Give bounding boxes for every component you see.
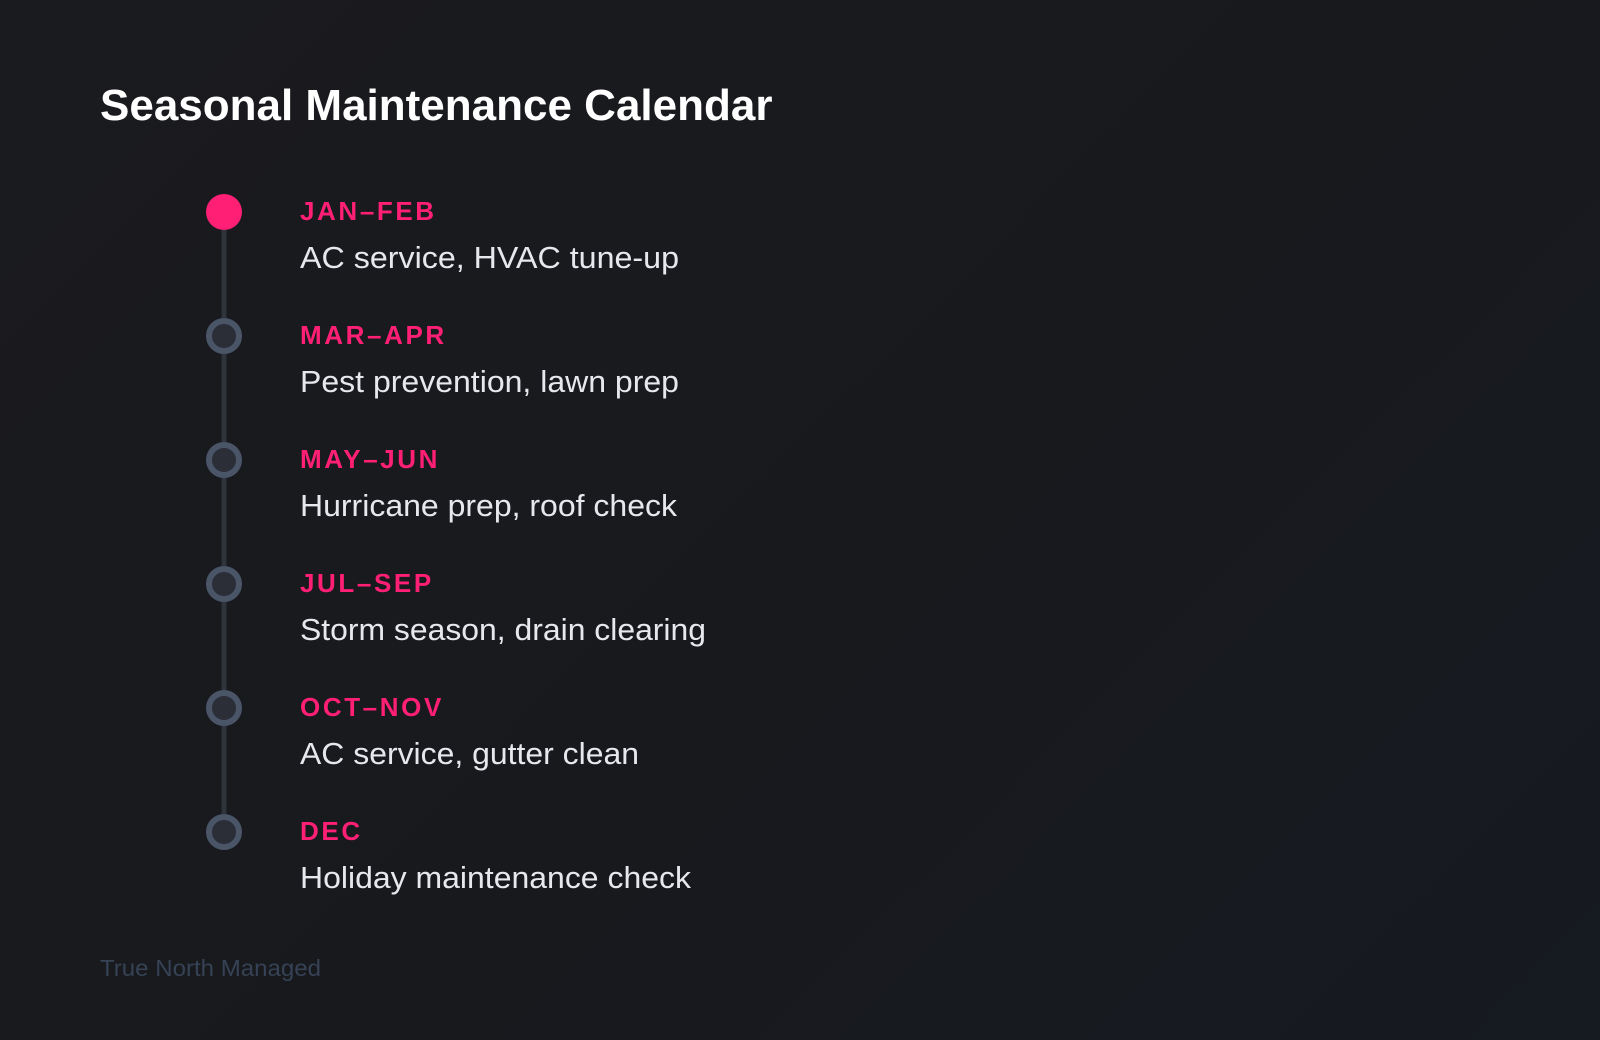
item: jan-feb: JAN–FEB [300,196,437,226]
item: jul-sep: JUL–SEP [300,568,434,598]
item: jan-feb [206,194,679,275]
item: oct-nov [209,692,639,771]
item: jul-sep: Storm season, drain clearing [300,612,706,647]
item: dec: Holiday maintenance check [300,860,692,895]
item: dec: DEC [300,816,363,846]
item: dec [209,816,692,895]
item: mar-apr [209,320,679,399]
footer: True North Managed [100,955,321,981]
item: may-jun [209,444,678,523]
item: may-jun: Hurricane prep, roof check [300,488,678,523]
item: mar-apr: MAR–APR [300,320,447,350]
item: oct-nov: OCT–NOV [300,692,444,722]
item: mar-apr: Pest prevention, lawn prep [300,364,679,399]
item: oct-nov: AC service, gutter clean [300,736,639,771]
timeline line [222,212,226,832]
item: jul-sep [209,568,706,647]
item: jan-feb: AC service, HVAC tune-up [300,240,679,275]
title: Seasonal Maintenance Calendar [100,81,772,130]
item: may-jun: MAY–JUN [300,444,440,474]
